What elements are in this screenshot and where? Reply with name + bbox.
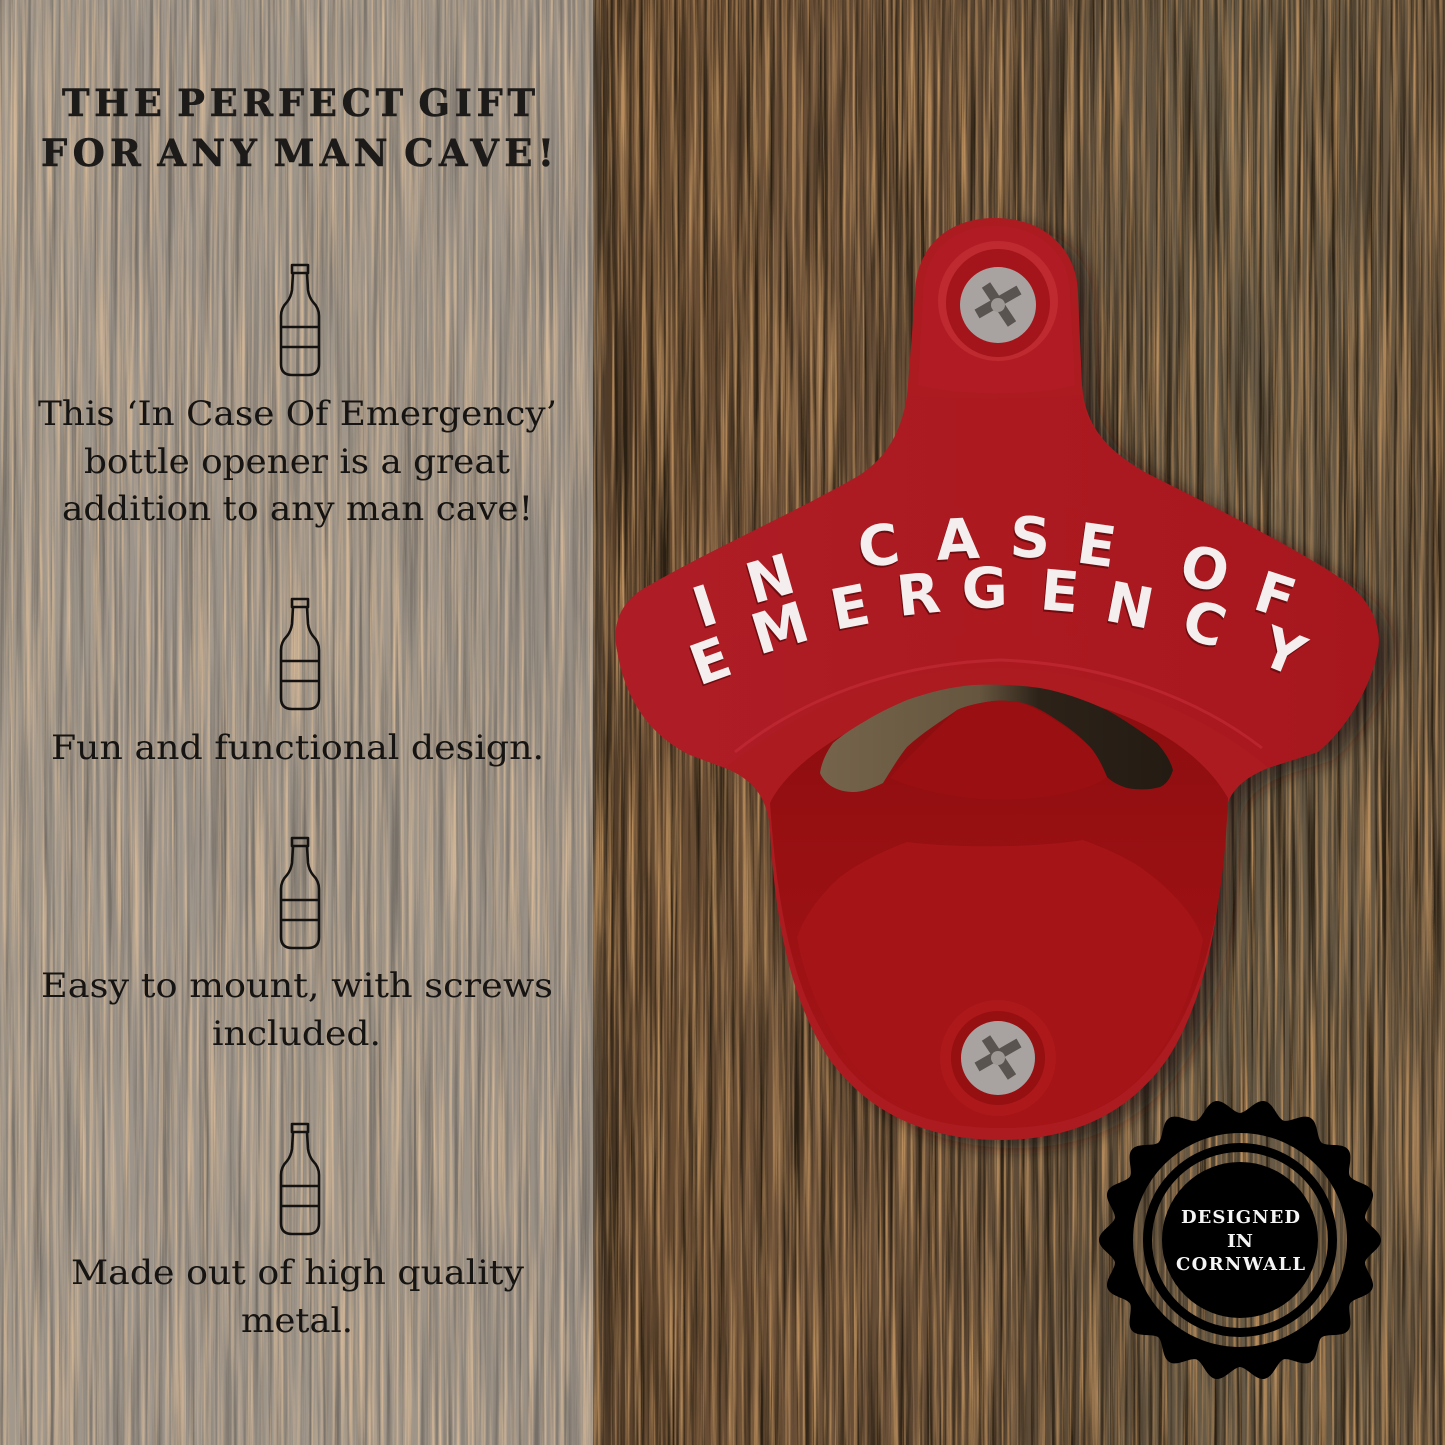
text block: intro [38,394,557,529]
icon: bottle 3 [281,838,320,948]
heading: THE PERFECT GIFT [62,81,535,125]
text block: intro: This ‘In Case Of Emergency’ [38,394,557,434]
text block: material [71,1253,525,1341]
front band [616,395,1379,768]
text block: intro: addition to any man cave! [62,489,533,529]
text block: material: Made out of high quality [71,1253,525,1293]
bottle opener [616,218,1394,1148]
icon: bottle 4 [281,1124,320,1234]
text block: mounting [41,966,553,1054]
text block: design: Fun and functional design. [51,728,544,768]
band lower lip [735,660,1262,752]
heading: FOR ANY MAN CAVE! [41,131,554,175]
badge: designed in cornwall: CORNWALL [1176,1254,1305,1275]
screw recess top [938,241,1058,361]
badge: designed in cornwall: DESIGNED [1181,1207,1300,1228]
text block: material: metal. [241,1301,353,1341]
panel: translucent left column [0,0,593,1445]
icon: bottle 1 [281,265,320,375]
text block: intro: bottle opener is a great [84,442,510,482]
icon: bottle 2 [281,599,320,709]
upper tab [918,226,1075,393]
lower cup [770,690,1228,1128]
heading [41,81,554,175]
lip under slot [890,701,1107,800]
screw recess bottom [940,1000,1056,1116]
plate [797,840,1203,1128]
embossed text: EMERGENCY: EMERGENCY [682,556,1315,699]
badge: designed in cornwall: IN [1227,1231,1253,1252]
embossed text: IN CASE OF: IN CASE OF [685,505,1303,641]
opening slot [820,685,1173,792]
screw top [960,267,1036,343]
badge: designed in cornwall [1099,1097,1381,1383]
text block: mounting: included. [212,1014,381,1054]
text block: mounting: Easy to mount, with screws [41,966,553,1006]
screw bottom [961,1021,1035,1095]
